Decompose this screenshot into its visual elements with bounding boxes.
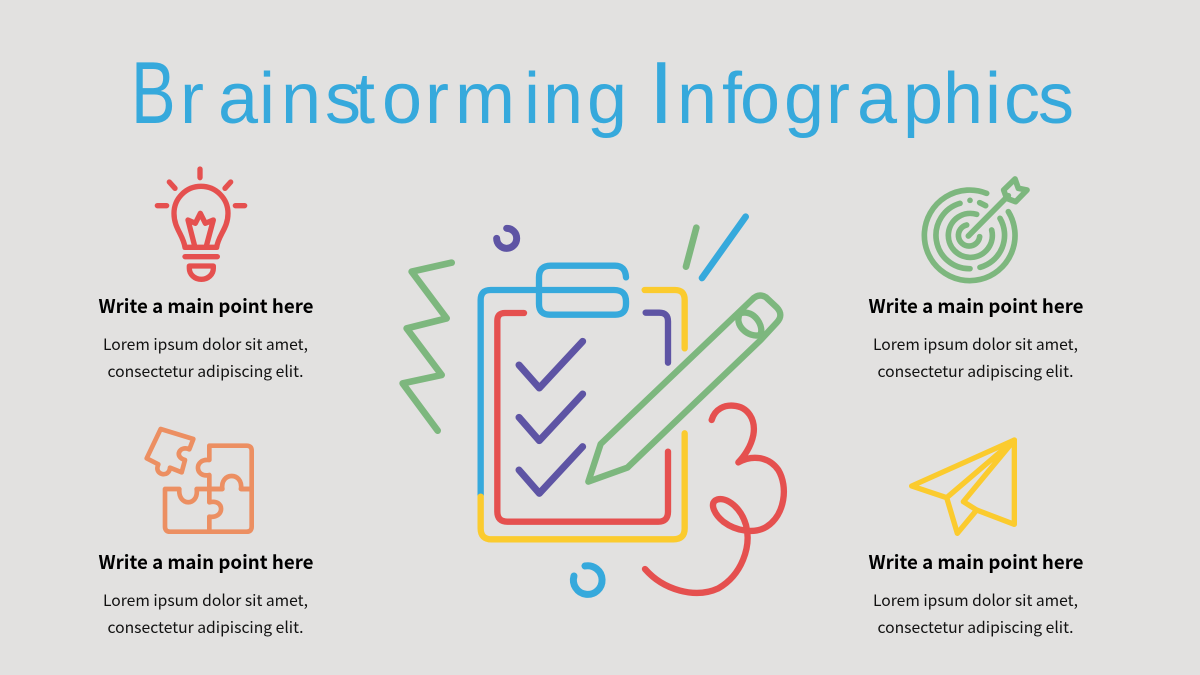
text block: bottom right: Write a main point here bbox=[868, 548, 1084, 575]
text block: bottom left: Write a main point here bbox=[98, 548, 314, 575]
clipboard outline: blue bbox=[481, 266, 626, 495]
check marks bbox=[519, 341, 583, 493]
title bbox=[131, 43, 1074, 142]
title: I bbox=[649, 43, 673, 142]
text block: top left: Write a main point here bbox=[98, 292, 314, 319]
pencil bbox=[588, 296, 780, 482]
text block: bottom right: consectetur adipiscing elit. bbox=[878, 616, 1074, 638]
pencil band loop bbox=[738, 313, 761, 336]
text block: bottom left bbox=[98, 548, 314, 638]
icon: paper plane bbox=[912, 440, 1014, 533]
zigzag bbox=[403, 263, 452, 431]
clipboard inner: purple bbox=[646, 313, 668, 363]
text block: bottom right: Lorem ipsum dolor sit amet, bbox=[873, 589, 1078, 611]
text block: bottom left: Lorem ipsum dolor sit amet, bbox=[103, 589, 308, 611]
title: rainstorming bbox=[180, 59, 660, 139]
spark lines bbox=[686, 228, 696, 267]
text block: bottom right bbox=[868, 548, 1084, 638]
text block: top right: Write a main point here bbox=[868, 292, 1084, 319]
text block: bottom left: consectetur adipiscing elit. bbox=[108, 616, 304, 638]
text block: top left: consectetur adipiscing elit. bbox=[108, 360, 304, 382]
title: B bbox=[131, 43, 176, 142]
text block: top right: consectetur adipiscing elit. bbox=[878, 360, 1074, 382]
title: nfographics bbox=[677, 59, 1074, 139]
clipboard inner: red bbox=[497, 313, 668, 522]
text block: top left: Lorem ipsum dolor sit amet, bbox=[103, 333, 308, 355]
central illustration: clipboard and pencil bbox=[403, 217, 784, 594]
text block: top right bbox=[868, 292, 1084, 382]
blue ring bbox=[573, 566, 602, 594]
icon: target bbox=[924, 179, 1027, 281]
text block: top right: Lorem ipsum dolor sit amet, bbox=[873, 333, 1078, 355]
text block: top left bbox=[98, 292, 314, 382]
icon: light bulb bbox=[157, 169, 245, 279]
clipboard outline: yellow bbox=[481, 290, 685, 539]
icon: puzzle bbox=[147, 429, 252, 532]
red swirl bbox=[645, 406, 784, 593]
purple ring bbox=[497, 228, 517, 248]
